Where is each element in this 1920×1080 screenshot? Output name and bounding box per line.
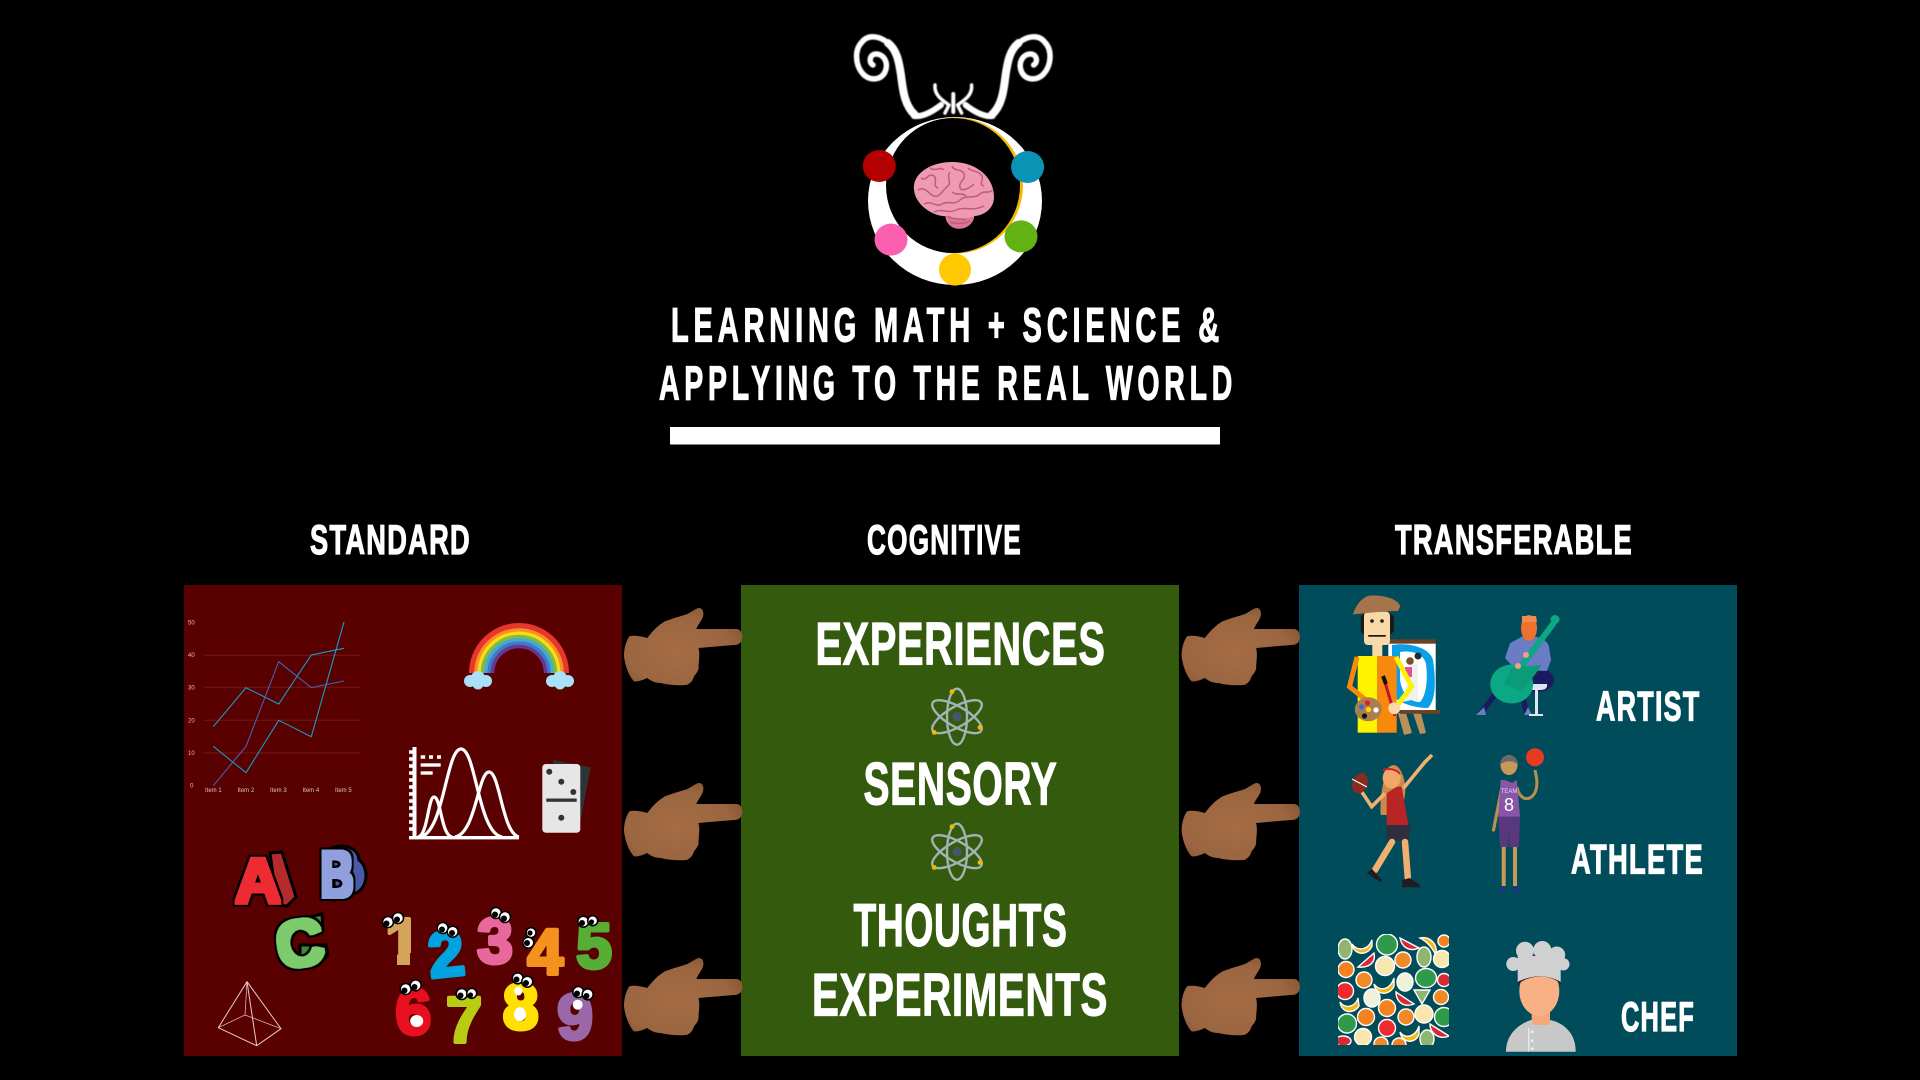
title: APPLYING TO THE REAL WORLD	[659, 358, 1237, 410]
icon: wireframe pyramid	[218, 982, 281, 1046]
fruit pattern	[1338, 934, 1449, 1045]
icon: basketball player: 8	[1504, 795, 1514, 815]
sensory: SENSORY	[864, 750, 1058, 818]
label: artist: ARTIST	[1596, 682, 1700, 730]
panel: cognitive	[741, 585, 1179, 1056]
pointing hand: left top	[624, 608, 742, 685]
pointing hand: right top	[1182, 608, 1300, 685]
letter blocks ABC: A	[235, 845, 281, 917]
experiments: EXPERIMENTS	[812, 962, 1108, 1028]
icon: painter at easel	[1350, 595, 1440, 735]
line chart: Item 2	[238, 788, 255, 794]
icon: atom	[928, 689, 986, 745]
icon: basketball player	[1494, 748, 1544, 892]
logo horns	[857, 37, 1050, 116]
title underline bar	[670, 427, 1220, 444]
line chart: 10	[188, 751, 195, 757]
line chart: 0	[190, 784, 194, 790]
logo dots	[863, 150, 1044, 286]
cartoon numbers 1-9: 1	[385, 905, 421, 977]
icon: atom	[928, 824, 986, 880]
pointing hand: right middle	[1182, 783, 1300, 860]
icon: chef	[1506, 941, 1576, 1052]
icon: rainbow	[464, 626, 574, 690]
heading: standard: STANDARD	[310, 516, 471, 563]
icon: basketball player: TEAM	[1501, 789, 1517, 795]
line chart: Item 3	[270, 788, 287, 794]
cartoon numbers 1-9: 5	[576, 910, 612, 982]
thoughts: THOUGHTS	[854, 892, 1068, 959]
logo: ornate ring with brain	[857, 37, 1050, 286]
icon: cellist	[1476, 615, 1560, 716]
cartoon numbers 1-9	[382, 905, 612, 1056]
line chart	[188, 621, 360, 794]
icon: football player	[1349, 755, 1432, 887]
line chart: Item 4	[302, 788, 320, 794]
cartoon numbers 1-9: 4	[528, 916, 564, 988]
letter blocks ABC: B	[320, 837, 354, 911]
pointing hand: left middle	[624, 783, 742, 860]
cartoon numbers 1-9: 7	[446, 984, 482, 1056]
icon: domino	[542, 760, 591, 833]
cartoon numbers 1-9: 8	[503, 971, 538, 1043]
line chart: Item 5	[335, 788, 352, 794]
cartoon numbers 1-9: 3	[477, 905, 513, 977]
experiences: EXPERIENCES	[816, 610, 1106, 678]
pointing hand: left bottom	[624, 958, 742, 1035]
heading: transferable: TRANSFERABLE	[1395, 516, 1633, 563]
label: athlete: ATHLETE	[1571, 836, 1704, 882]
icon: distribution curves	[409, 747, 519, 839]
line chart: 40	[188, 653, 195, 659]
panel: transferable	[1299, 585, 1737, 1056]
line chart: 50	[188, 621, 195, 627]
title	[659, 300, 1237, 410]
cartoon numbers 1-9: 9	[557, 981, 593, 1053]
icon: brain	[914, 162, 994, 229]
letter blocks ABC: C	[271, 903, 328, 983]
cartoon numbers 1-9: 6	[396, 976, 431, 1048]
letter blocks ABC	[235, 837, 366, 983]
panel: standard	[184, 585, 622, 1056]
line chart: Item 1	[205, 788, 222, 794]
pointing hand: right bottom	[1182, 958, 1300, 1035]
cartoon numbers 1-9: 2	[425, 916, 468, 992]
line chart: 30	[188, 685, 195, 691]
title: LEARNING MATH + SCIENCE &	[671, 300, 1224, 352]
heading: cognitive: COGNITIVE	[867, 516, 1022, 563]
logo ring	[868, 117, 1042, 285]
line chart: 20	[188, 718, 195, 724]
label: chef: CHEF	[1621, 993, 1695, 1040]
